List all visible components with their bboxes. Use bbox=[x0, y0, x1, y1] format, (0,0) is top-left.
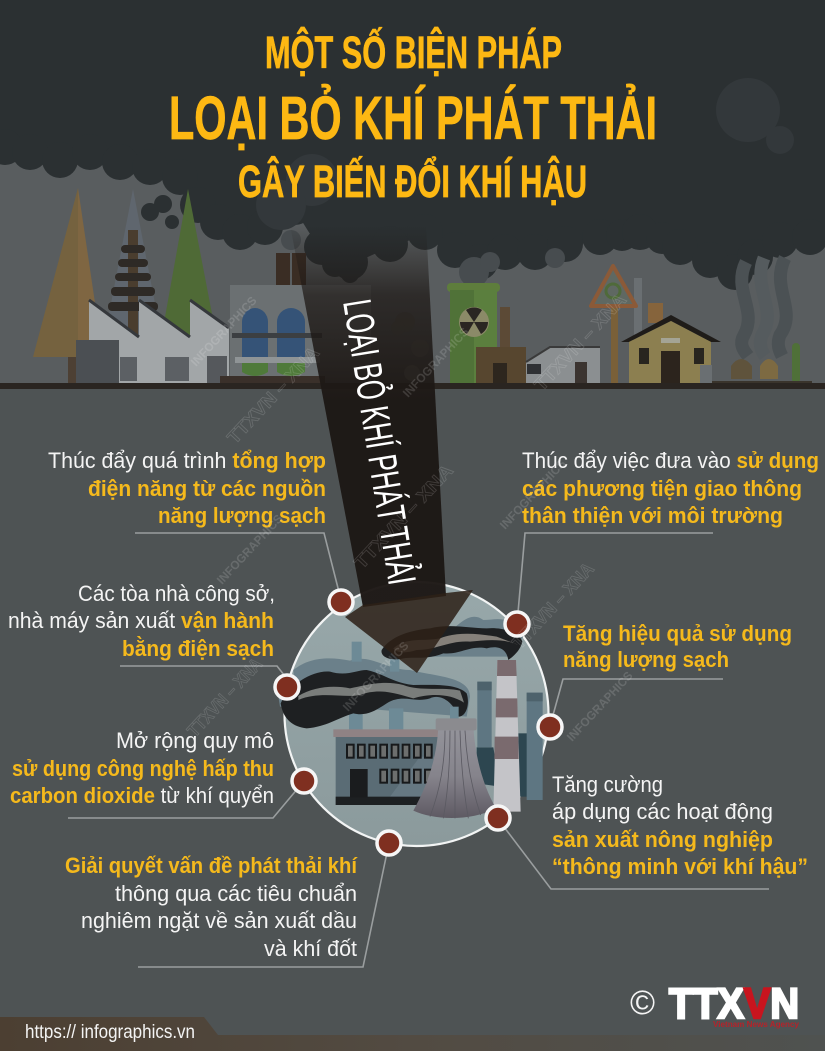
watermarks: TTXVN – XNA bbox=[183, 654, 266, 741]
arrow label: LOẠI BỎ KHÍ PHÁT THẢI bbox=[334, 296, 426, 588]
plant building with blue tanks bbox=[220, 253, 371, 385]
grey smoke band left bbox=[298, 683, 464, 703]
text block: vận hành bằng điện sạch bbox=[8, 581, 275, 661]
back smoke bbox=[277, 617, 523, 717]
logo: TTXVN bbox=[630, 980, 800, 1029]
text block: tăng hiệu quả: Tăng hiệu quả sử dụng bbox=[563, 621, 792, 646]
watermarks: TTXVN – XNA bbox=[508, 559, 598, 653]
text block: công nghệ hấp thu carbon: carbon dioxide từ khí quyển bbox=[10, 783, 274, 808]
marker dots bbox=[275, 590, 562, 855]
yellow house bbox=[621, 303, 721, 385]
tall grey chimneys bbox=[477, 682, 543, 800]
arrow shaft bbox=[290, 225, 446, 607]
text block: giải quyết vấn đề phát thải khí: nghiêm ngặt về sản xuất dầu bbox=[81, 908, 357, 933]
text block: phương tiện giao thông bbox=[522, 448, 819, 528]
title bbox=[169, 27, 657, 207]
chimney smoke puffs bbox=[281, 230, 565, 287]
cooling tower bbox=[413, 718, 496, 818]
tree: grey with trunk bbox=[103, 189, 163, 350]
biohazard sign bbox=[591, 266, 642, 385]
text block: vận hành bằng điện sạch: bằng điện sạch bbox=[122, 636, 274, 661]
text block: phương tiện giao thông: Thúc đẩy việc đưa vào sử dụng bbox=[522, 448, 819, 473]
watermarks: INFOGRAPHICS bbox=[214, 512, 286, 587]
text block: nông nghiệp thông minh: áp dụng các hoạt động bbox=[552, 799, 773, 824]
factory illustration bbox=[277, 617, 543, 818]
watermarks: TTXVN – XNA bbox=[223, 343, 323, 448]
title line 3: GÂY BIẾN ĐỔI KHÍ HẬU bbox=[238, 156, 587, 207]
arrow head bbox=[345, 590, 473, 673]
text block: tổng hợp điện năng sạch: điện năng từ các nguồn bbox=[88, 476, 326, 501]
watermarks: TTXVN – XNA bbox=[530, 290, 630, 395]
small chimney bbox=[450, 707, 459, 720]
nuclear cooling silo bbox=[447, 283, 500, 385]
text block: giải quyết vấn đề phát thải khí: Giải quyết vấn đề phát thải khí bbox=[65, 853, 358, 878]
factory with sawtooth roofs bbox=[76, 300, 229, 385]
watermarks: INFOGRAPHICS bbox=[340, 639, 412, 714]
text block: tổng hợp điện năng sạch: Thúc đẩy quá trình tổng hợp bbox=[48, 448, 326, 473]
watermarks: INFOGRAPHICS bbox=[564, 669, 636, 744]
text block: tăng hiệu quả: năng lượng sạch bbox=[563, 647, 729, 672]
text block: giải quyết vấn đề phát thải khí bbox=[65, 853, 358, 961]
striped chimney bbox=[493, 660, 521, 812]
text block: công nghệ hấp thu carbon bbox=[10, 728, 274, 808]
text block: phương tiện giao thông: thân thiện với môi trường bbox=[522, 503, 783, 528]
tree: brown bbox=[33, 188, 103, 385]
watermarks: INFOGRAPHICS bbox=[497, 457, 569, 532]
footer band bbox=[0, 1017, 825, 1051]
watermarks bbox=[183, 290, 636, 744]
website url: https:// infographics.vn bbox=[25, 1022, 195, 1043]
copyright symbol: © bbox=[630, 984, 655, 1022]
text block: tổng hợp điện năng sạch bbox=[48, 448, 326, 528]
text block: vận hành bằng điện sạch: Các tòa nhà công sở, bbox=[78, 581, 275, 606]
lighter cloud puffs bbox=[256, 78, 794, 230]
ground line bbox=[0, 383, 825, 389]
title line 1: MỘT SỐ BIỆN PHÁP bbox=[265, 27, 562, 78]
small grey house bbox=[526, 347, 600, 385]
text block: nông nghiệp thông minh: sản xuất nông nghiệp bbox=[552, 827, 773, 852]
wordmark: TTXVN bbox=[669, 980, 799, 1028]
connector lines bbox=[68, 533, 769, 967]
text block: giải quyết vấn đề phát thải khí: thông qua các tiêu chuẩn bbox=[115, 881, 357, 906]
main building bbox=[333, 729, 440, 805]
black smoke left bbox=[281, 670, 468, 728]
details seen through shaft bbox=[391, 312, 429, 381]
dark smoke cloud bbox=[0, 0, 825, 290]
city skyline bbox=[33, 188, 812, 385]
text block: giải quyết vấn đề phát thải khí: và khí đốt bbox=[264, 936, 357, 961]
wavy grey smoke streams bbox=[742, 258, 786, 356]
text block: công nghệ hấp thu carbon: Mở rộng quy mô bbox=[116, 728, 274, 753]
watermarks: INFOGRAPHICS bbox=[400, 325, 472, 400]
brown tower building bbox=[476, 307, 526, 385]
text block: nông nghiệp thông minh: “thông minh với khí hậu” bbox=[552, 854, 808, 879]
text block: nông nghiệp thông minh: Tăng cường bbox=[552, 772, 663, 797]
text block: phương tiện giao thông: các phương tiện giao thông bbox=[522, 476, 802, 501]
text block: vận hành bằng điện sạch: nhà máy sản xuất vận hành bbox=[8, 608, 274, 633]
grey smoke band right bbox=[393, 634, 518, 652]
tree: green bbox=[160, 189, 218, 345]
arrow: loại bỏ khí phát thải bbox=[290, 225, 473, 673]
watermarks: INFOGRAPHICS bbox=[188, 294, 260, 369]
back chimneys bbox=[349, 642, 403, 730]
watermarks: TTXVN – XNA bbox=[350, 460, 457, 573]
text block: công nghệ hấp thu carbon: sử dụng công nghệ hấp thu bbox=[12, 756, 274, 781]
small foreground shapes bbox=[700, 343, 812, 385]
text block: tổng hợp điện năng sạch: năng lượng sạch bbox=[158, 503, 326, 528]
tagline: Vietnam News Agency bbox=[713, 1020, 800, 1029]
text block: tăng hiệu quả bbox=[563, 621, 792, 672]
black smoke right bbox=[381, 626, 522, 660]
text block: nông nghiệp thông minh bbox=[552, 772, 808, 879]
central disc bbox=[284, 582, 548, 846]
